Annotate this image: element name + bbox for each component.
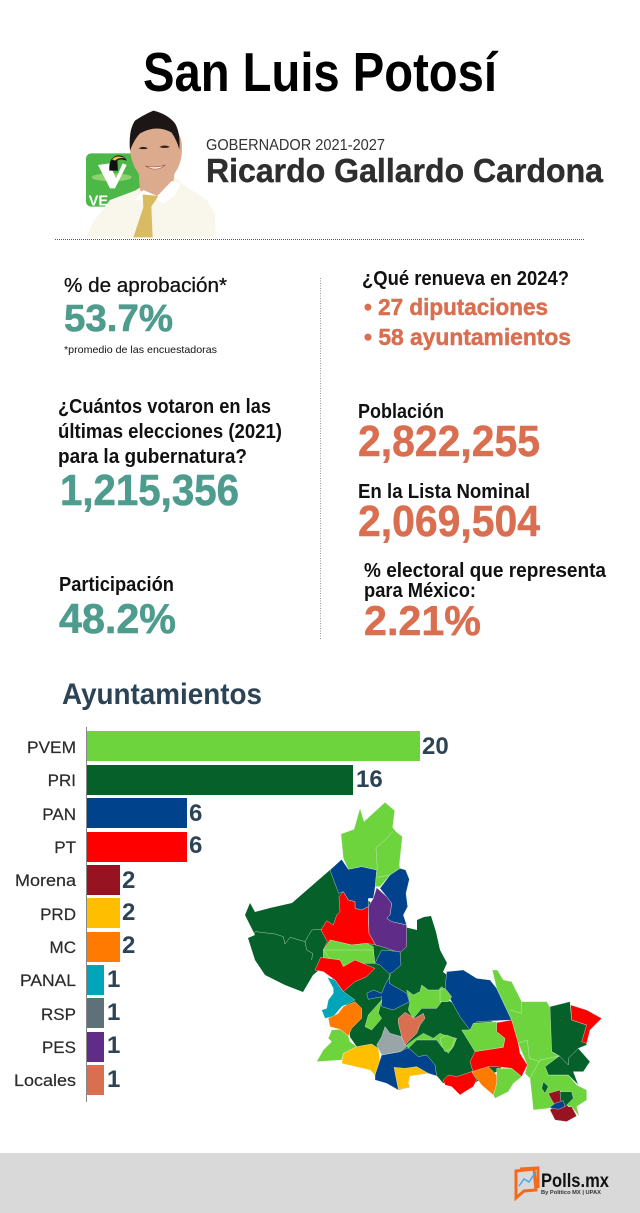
participation stat: 48.2% <box>59 595 176 642</box>
bar chart: PAN <box>42 805 76 824</box>
nominal list stat: 2,069,504 <box>358 497 540 546</box>
renewal list: • 27 diputaciones <box>364 294 548 320</box>
tie <box>133 194 158 237</box>
bar chart: PANAL <box>20 971 76 990</box>
votes stat: para la gubernatura? <box>58 446 247 468</box>
bar chart: PVEM <box>27 738 76 757</box>
population stat: Población <box>358 401 444 423</box>
approval stat: % de aprobación* <box>64 275 227 297</box>
bar chart: Locales <box>14 1071 76 1090</box>
electoral share stat: % electoral que representa <box>364 560 607 582</box>
eyes <box>139 145 170 149</box>
smile <box>145 165 165 169</box>
bar chart: 6 <box>189 800 202 827</box>
electoral share stat: para México: <box>364 580 476 602</box>
map of municipalities <box>245 802 602 1122</box>
votes stat: 1,215,356 <box>60 466 239 515</box>
shirt <box>86 175 216 237</box>
approval stat: *promedio de las encuestadoras <box>64 344 217 356</box>
bar chart: PT <box>54 838 76 857</box>
electoral share stat <box>364 560 607 644</box>
bar chart: PES <box>42 1038 76 1057</box>
electoral share stat: 2.21% <box>364 597 481 644</box>
approval stat: 53.7% <box>64 298 173 340</box>
renewal list: • 58 ayuntamientos <box>364 324 571 350</box>
bar chart: 1 <box>107 1066 120 1093</box>
icon: Polls.mx logo <box>516 1168 538 1198</box>
bar chart: 16 <box>356 766 383 793</box>
approval stat <box>64 275 227 356</box>
bar chart: 2 <box>122 932 135 959</box>
candidate photo with party logo <box>86 111 216 237</box>
renewal list: ¿Qué renueva en 2024? <box>362 268 569 290</box>
bar chart: 2 <box>122 899 135 926</box>
section heading: Ayuntamientos <box>62 678 262 711</box>
neck <box>138 168 175 196</box>
logo wordmark: By Politico MX | UPAX <box>541 1190 602 1196</box>
population stat: 2,822,255 <box>358 417 540 466</box>
bar chart: 6 <box>189 832 202 859</box>
renewal list <box>362 268 571 350</box>
bar chart: 2 <box>122 867 135 894</box>
nominal list stat: En la Lista Nominal <box>358 481 530 503</box>
governor name: Ricardo Gallardo Cardona <box>206 152 604 189</box>
bar chart: 1 <box>107 966 120 993</box>
bar chart: MC <box>50 938 76 957</box>
votes stat: ¿Cuántos votaron en las <box>58 396 271 418</box>
logo wordmark: Polls.mx <box>541 1171 609 1192</box>
bar chart: RSP <box>41 1005 76 1024</box>
bar chart: 20 <box>422 733 449 760</box>
bar chart: 1 <box>107 1032 120 1059</box>
face <box>130 124 182 183</box>
office label: GOBERNADOR 2021-2027 <box>206 137 385 154</box>
bar chart: PRD <box>40 905 76 924</box>
footer band <box>0 1153 640 1213</box>
title: San Luis Potosí <box>143 41 498 103</box>
hair <box>130 111 180 151</box>
bar chart: 1 <box>107 999 120 1026</box>
bar chart: PRI <box>48 771 76 790</box>
votes stat <box>58 396 282 515</box>
votes stat: últimas elecciones (2021) <box>58 421 282 443</box>
icon: party logo: VE <box>89 193 108 209</box>
collar <box>135 181 181 204</box>
bar chart <box>14 727 449 1102</box>
participation stat: Participación <box>59 574 174 596</box>
participation stat <box>59 574 176 642</box>
bar chart: Morena <box>15 871 77 890</box>
